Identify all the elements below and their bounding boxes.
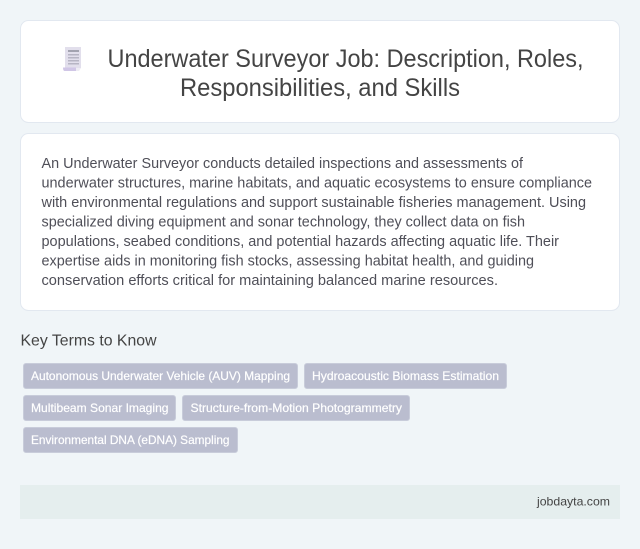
tag: hydroacoustic: Hydroacoustic Biomass Estimation bbox=[312, 369, 499, 383]
title bbox=[108, 45, 584, 102]
panel: title card bbox=[20, 20, 620, 122]
tag: multibeam sonar bbox=[24, 396, 176, 420]
heading: key terms: Key Terms to Know bbox=[20, 332, 157, 350]
text block: description: expertise aids in monitoring fish stocks, assessing habitat health, and guiding bbox=[42, 254, 534, 270]
tag list bbox=[24, 364, 506, 452]
text block: description: conservation efforts critical for maintaining balanced marine resources. bbox=[42, 273, 498, 289]
icon: document scroll bbox=[63, 47, 81, 71]
tag: photogrammetry bbox=[182, 396, 410, 420]
tag: eDNA bbox=[24, 428, 238, 452]
text block: description: populations, seabed conditions, and potential hazards affecting aquatic life. Their bbox=[42, 234, 559, 250]
title: Underwater Surveyor Job: Description, Roles, bbox=[108, 45, 584, 73]
title: Responsibilities, and Skills bbox=[180, 74, 460, 102]
tag: AUV mapping bbox=[24, 364, 298, 388]
text block: description: with environmental regulations and support sustainable fisheries management. Using bbox=[41, 195, 586, 211]
tag: multibeam sonar: Multibeam Sonar Imaging bbox=[31, 401, 168, 415]
text block: description: An Underwater Surveyor conducts detailed inspections and assessments of bbox=[42, 156, 524, 172]
text block: description: underwater structures, marine habitats, and aquatic ecosystems to ensure compliance bbox=[42, 176, 592, 192]
footer: jobdayta.com bbox=[536, 494, 610, 508]
text block: description bbox=[41, 156, 592, 289]
text block: description: specialized diving equipment and sonar technology, they collect data on fish bbox=[42, 214, 525, 230]
tag: eDNA: Environmental DNA (eDNA) Sampling bbox=[31, 433, 230, 447]
tag: hydroacoustic bbox=[304, 364, 506, 388]
footer bbox=[20, 485, 620, 519]
panel: description card bbox=[20, 134, 620, 310]
tag: AUV mapping: Autonomous Underwater Vehicle (AUV) Mapping bbox=[31, 369, 290, 383]
tag: photogrammetry: Structure-from-Motion Photogrammetry bbox=[190, 401, 402, 415]
